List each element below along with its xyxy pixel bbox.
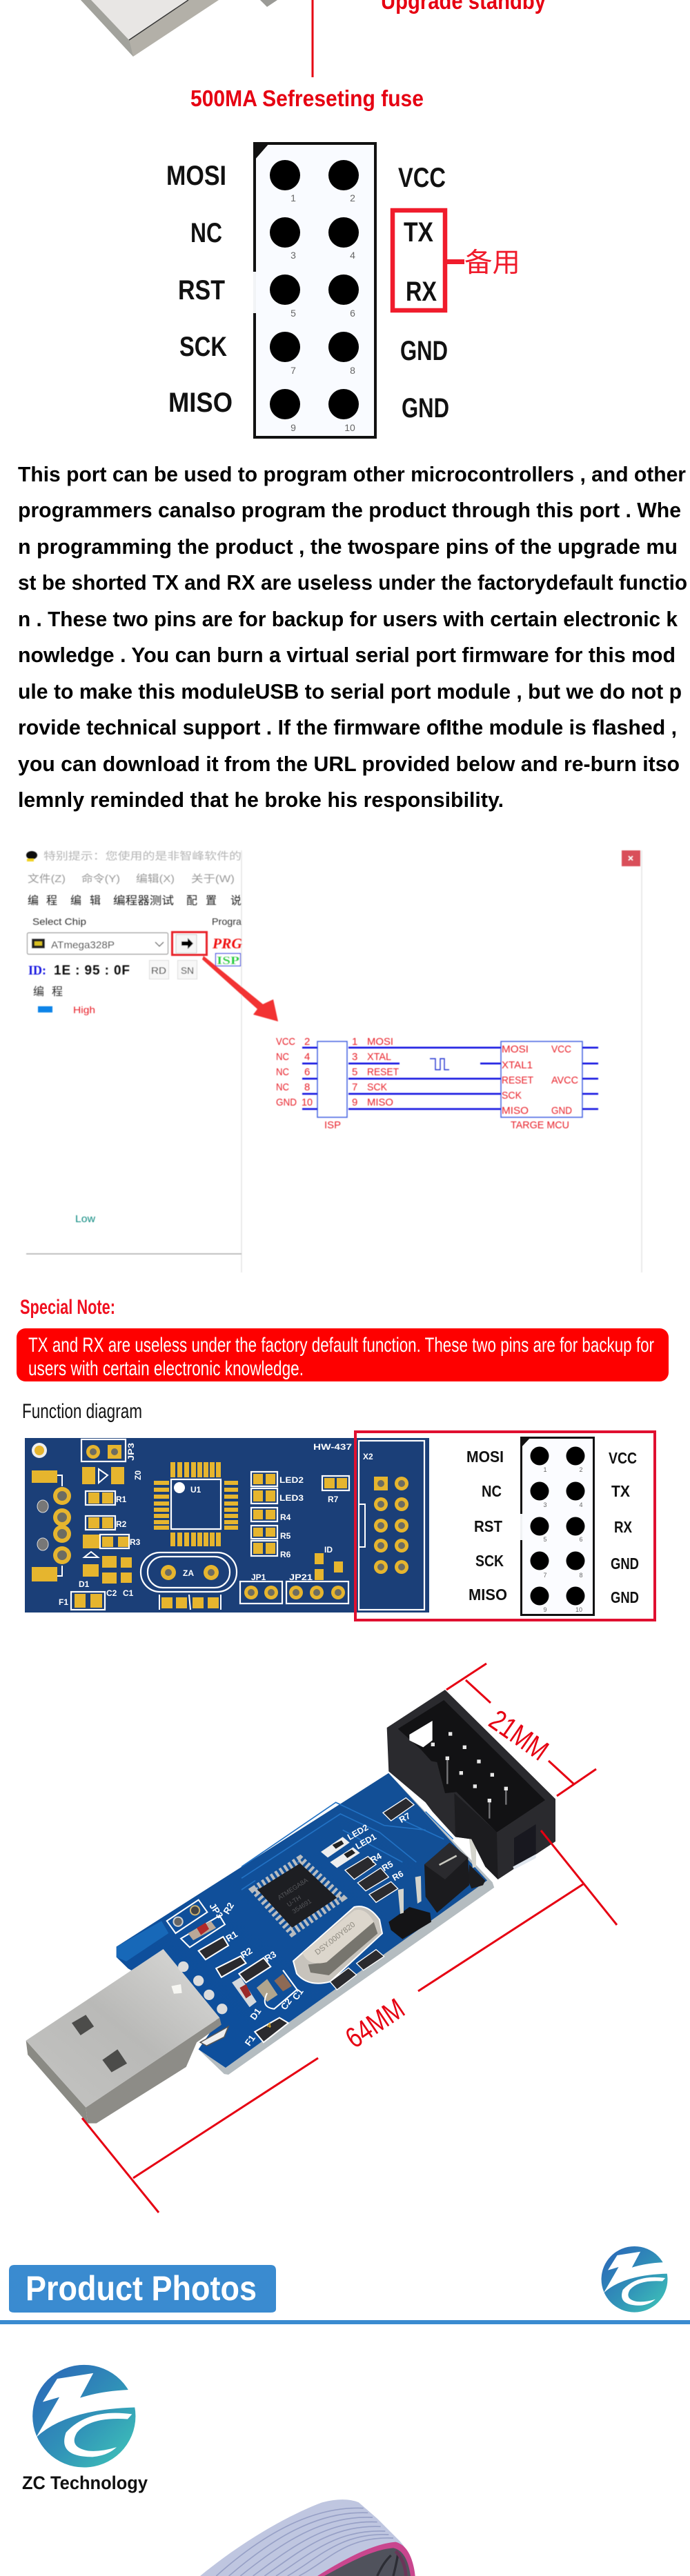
dimension lines xyxy=(82,1664,617,2213)
right pin labels: GND xyxy=(402,393,449,423)
microcontroller chip: U-TH xyxy=(286,1894,302,1908)
diode D1 capacitors C1 C2 fuse F1: C2 xyxy=(106,1588,117,1598)
menu bar: 关于(W) xyxy=(191,873,235,885)
title text: 特别提示：您使用的是非智峰软件的 xyxy=(43,850,241,862)
schematic labels: RESET xyxy=(502,1075,533,1086)
photo fragment: USB plug cropped at top xyxy=(81,0,277,57)
text block: port description: you can download it from the URL provided below and re-burn itso xyxy=(18,752,680,776)
MCU U1: U1 xyxy=(190,1485,201,1495)
schematic labels: 5 xyxy=(352,1066,357,1078)
chip id: 1E : 95 : 0F xyxy=(54,963,130,978)
pin holes xyxy=(270,160,359,419)
board silkscreen left: C2 xyxy=(279,1997,294,2012)
waveform xyxy=(430,1059,449,1070)
board silkscreen right: LED1 xyxy=(354,1832,378,1851)
text block: port description: n programming the product , the twospare pins of the upgrade mu xyxy=(18,535,678,559)
small header holes xyxy=(530,1447,585,1606)
board silkscreen right: R5 xyxy=(380,1859,395,1873)
arrow button xyxy=(172,932,207,955)
icon: large ZC logo xyxy=(32,2365,137,2468)
brand name: ZC Technology xyxy=(22,2473,148,2493)
menu bar xyxy=(28,872,235,885)
wires xyxy=(302,1048,598,1109)
resistors R1 R2 R3: R3 xyxy=(130,1537,141,1547)
LEDs and resistors R4 to R7: LED3 xyxy=(279,1493,304,1503)
program label: Progra xyxy=(212,916,241,927)
jumpers JP1 JP2 xyxy=(240,1572,348,1604)
schematic labels: MOSI xyxy=(502,1044,529,1055)
left labels: MISO xyxy=(469,1586,507,1604)
LEDs and resistors R4 to R7: R7 xyxy=(328,1495,339,1504)
pin numbers xyxy=(290,192,355,433)
pin numbers: 3 xyxy=(290,250,296,261)
small header numbers xyxy=(543,1466,583,1613)
text block: port description: lemnly reminded that he broke his responsibility. xyxy=(18,788,504,812)
board silkscreen left xyxy=(207,1901,306,2048)
schematic labels: XTAL1 xyxy=(502,1059,533,1071)
schematic labels: 6 xyxy=(304,1066,310,1078)
text block: port description: This port can be used to program other microcontrollers , and other xyxy=(18,462,686,486)
schematic labels: MOSI xyxy=(367,1036,393,1048)
arrow: red pointer to schematic xyxy=(202,956,278,1021)
ID pads: ID xyxy=(324,1545,333,1555)
tabs: 说 xyxy=(230,895,241,907)
board silkscreen left: R3 xyxy=(263,1949,278,1964)
board label: HW-437 xyxy=(313,1442,352,1452)
microcontroller chip: 354691 xyxy=(291,1897,313,1915)
tabs: 编程器测试 xyxy=(113,895,174,907)
left pin labels: RST xyxy=(178,275,225,306)
crystal oscillator: DSY.000Y820 xyxy=(313,1921,357,1957)
SMD parts left xyxy=(32,1470,62,1581)
schematic labels: GND xyxy=(276,1097,297,1108)
menu bar: 命令(Y) xyxy=(81,872,120,885)
chip id: SN xyxy=(181,965,194,976)
heading: special note: Special Note: xyxy=(20,1296,115,1319)
pin numbers: 2 xyxy=(350,192,355,203)
LEDs and resistors R4 to R7: R4 xyxy=(280,1512,291,1522)
callout: red warning banner xyxy=(17,1328,669,1381)
pin numbers: 7 xyxy=(290,365,296,376)
schematic labels: SCK xyxy=(367,1081,387,1093)
USB pads xyxy=(37,1487,71,1564)
heading: function diagram: Function diagram xyxy=(22,1400,142,1423)
close button: × xyxy=(628,852,633,863)
traces xyxy=(241,1802,453,1890)
crystal: ZA xyxy=(183,1568,194,1578)
spare pins highlight xyxy=(393,210,520,310)
callout: 500MA fuse label: 500MA Sefreseting fuse xyxy=(190,86,424,111)
pin numbers: 6 xyxy=(350,308,355,319)
chip selector xyxy=(28,916,168,955)
resistors R1 R2 R3 xyxy=(83,1491,141,1548)
text block: port description: n . These two pins are for backup for users with certain electronic k xyxy=(18,607,678,631)
schematic labels: TARGE MCU xyxy=(511,1119,569,1131)
small header numbers: 6 xyxy=(579,1536,583,1543)
board silkscreen left: R2 xyxy=(221,1901,236,1916)
right pin labels: GND xyxy=(400,336,448,366)
header notch xyxy=(255,143,269,160)
JP3: JP3 xyxy=(126,1443,136,1461)
schematic labels: RESET xyxy=(367,1066,399,1078)
panel: programmer software screenshot xyxy=(26,850,642,1272)
schematic labels: NC xyxy=(276,1066,289,1078)
program label: PRG xyxy=(212,935,242,952)
tabs: 配 置 xyxy=(186,895,217,907)
chip selector: Select Chip xyxy=(32,916,86,927)
circuit board xyxy=(117,1773,494,2075)
dimension label: length: 64MM xyxy=(339,1992,411,2055)
JP3 xyxy=(81,1439,136,1461)
jumpers JP1 JP2: JP21 xyxy=(289,1572,313,1582)
pin numbers: 9 xyxy=(290,422,296,433)
pin headers and jumper xyxy=(388,1839,485,1939)
small header numbers: 2 xyxy=(579,1466,583,1473)
panel: pinout highlight box xyxy=(355,1432,655,1620)
menu bar: 编辑(X) xyxy=(136,873,175,885)
LEDs and resistors R4 to R7: R5 xyxy=(280,1531,291,1541)
pin numbers: 8 xyxy=(350,365,355,376)
board silkscreen left: JP3 xyxy=(207,1901,225,1920)
tabs xyxy=(28,895,241,907)
bottom pads xyxy=(159,1595,221,1610)
X2 connector footprint: X2 xyxy=(363,1452,373,1461)
spare pins highlight: 备用 xyxy=(464,248,520,278)
LEDs and resistors R4 to R7 xyxy=(251,1472,349,1559)
schematic labels: MISO xyxy=(367,1097,393,1108)
callout: red warning banner: users with certain electronic knowledge. xyxy=(28,1357,304,1380)
schematic labels: 10 xyxy=(302,1097,313,1108)
app icon xyxy=(26,851,37,861)
ID pads xyxy=(315,1545,343,1580)
header outline xyxy=(255,143,375,437)
chip id: ID: xyxy=(28,963,46,978)
crystal side pads xyxy=(330,1950,384,1990)
board silkscreen left: F1 xyxy=(243,2033,257,2048)
jumpers JP1 JP2: JP1 xyxy=(251,1572,266,1582)
small header numbers: 7 xyxy=(543,1572,547,1579)
board silkscreen right xyxy=(346,1811,412,1883)
right pin labels: TX xyxy=(404,217,433,248)
window edges xyxy=(26,850,642,1272)
section divider xyxy=(0,2320,690,2324)
small header numbers: 3 xyxy=(543,1501,547,1508)
black IDC connector xyxy=(387,1690,555,1879)
left pin labels: MISO xyxy=(168,388,233,418)
ISP box xyxy=(317,1041,347,1117)
level indicator: Low xyxy=(75,1213,95,1225)
red frame xyxy=(355,1432,655,1620)
pin numbers: 1 xyxy=(290,192,296,203)
pin numbers: 5 xyxy=(290,308,296,319)
chip id: RD xyxy=(151,965,166,976)
USB plug xyxy=(26,1949,228,2124)
program label xyxy=(212,916,242,967)
right labels xyxy=(609,1449,639,1606)
schematic labels: 7 xyxy=(352,1081,357,1093)
diode D1 capacitors C1 C2 fuse F1: D1 xyxy=(79,1579,90,1589)
MCU U1 xyxy=(154,1462,238,1546)
schematic labels: AVCC xyxy=(551,1075,578,1086)
product photo: USBASP module xyxy=(26,1664,617,2213)
crystal xyxy=(141,1552,237,1592)
resistors R1 R2 R3: R2 xyxy=(116,1519,127,1529)
right labels: GND xyxy=(611,1588,639,1606)
small header numbers: 4 xyxy=(579,1501,583,1508)
close button xyxy=(622,850,640,866)
text block: port description: programmers canalso program the product through this port . Whe xyxy=(18,498,681,522)
schematic labels: ISP xyxy=(324,1119,341,1131)
crystal oscillator xyxy=(293,1906,382,1984)
diode D1 capacitors C1 C2 fuse F1: F1 xyxy=(59,1597,68,1607)
dimension label: width: 21MM xyxy=(484,1704,555,1767)
schematic labels: MISO xyxy=(502,1105,529,1117)
left labels xyxy=(466,1448,507,1604)
right labels: RX xyxy=(614,1518,633,1536)
left pin labels xyxy=(166,161,233,418)
left labels: SCK xyxy=(475,1552,504,1570)
schematic labels: 2 xyxy=(304,1036,310,1048)
schematic labels: SCK xyxy=(502,1090,522,1101)
right pin labels: VCC xyxy=(398,163,446,193)
diode D1 capacitors C1 C2 fuse F1: C1 xyxy=(123,1588,134,1598)
board xyxy=(25,1438,429,1613)
level indicator: High xyxy=(73,1004,95,1015)
menu bar: 文件(Z) xyxy=(28,873,66,885)
small header outline xyxy=(522,1437,593,1615)
microcontroller chip: ATMEGA8A xyxy=(277,1877,310,1901)
schematic labels: 1 xyxy=(352,1036,357,1048)
LEDs and resistors R4 to R7: R6 xyxy=(280,1550,291,1559)
text block: port description: nowledge . You can burn a virtual serial port firmware for this mod xyxy=(18,643,676,667)
schematic labels: 8 xyxy=(304,1081,310,1093)
board silkscreen right: R6 xyxy=(391,1869,405,1883)
left board parts xyxy=(167,1900,297,2042)
left pin labels: NC xyxy=(190,218,222,248)
schematic labels: NC xyxy=(276,1081,289,1093)
board silkscreen left: R2 xyxy=(239,1946,254,1960)
board silkscreen left: C1 xyxy=(290,1986,306,2002)
small header numbers: 1 xyxy=(543,1466,547,1473)
level indicator xyxy=(38,1004,95,1225)
tabs: 编 程 xyxy=(28,895,57,907)
pin numbers: 4 xyxy=(350,250,355,261)
right pin labels: RX xyxy=(406,277,437,307)
schematic labels: XTAL xyxy=(367,1051,391,1063)
schematic labels xyxy=(276,1036,578,1131)
right pin labels xyxy=(398,163,449,423)
right labels: GND xyxy=(611,1555,639,1572)
chip id xyxy=(28,960,197,979)
product photo: ribbon cable xyxy=(200,2499,415,2576)
small header numbers: 8 xyxy=(579,1572,583,1579)
target box xyxy=(501,1041,582,1117)
icon: small ZC logo xyxy=(602,2246,668,2313)
schematic labels: 9 xyxy=(352,1097,357,1108)
schematic labels: GND xyxy=(551,1105,572,1117)
left pin labels: MOSI xyxy=(166,161,226,191)
diode Z0 xyxy=(82,1467,143,1484)
board silkscreen right: R4 xyxy=(368,1851,384,1865)
left labels: MOSI xyxy=(466,1448,504,1466)
board silkscreen right: R7 xyxy=(397,1811,412,1825)
LEDs and resistors R4 to R7: LED2 xyxy=(279,1475,304,1485)
small header numbers: 9 xyxy=(543,1606,547,1613)
small header notch xyxy=(521,1437,531,1448)
right labels: TX xyxy=(611,1482,631,1500)
schematic labels: VCC xyxy=(551,1044,571,1055)
small header numbers: 5 xyxy=(543,1536,547,1543)
text block: port description: ule to make this moduleUSB to serial port module , but we do not p xyxy=(18,679,682,703)
board silkscreen right: LED2 xyxy=(346,1823,370,1842)
resistors R1 R2 R3: R1 xyxy=(116,1495,127,1504)
section heading: product photos: Product Photos xyxy=(26,2269,257,2308)
left pin labels: SCK xyxy=(179,332,227,362)
diode Z0: Z0 xyxy=(133,1470,143,1480)
LEDs and resistors xyxy=(321,1798,414,1902)
small header numbers: 10 xyxy=(575,1606,582,1613)
left board parts: 4 xyxy=(267,2022,271,2030)
right labels: VCC xyxy=(609,1449,637,1467)
schematic labels: 3 xyxy=(352,1051,357,1063)
board silkscreen left: D1 xyxy=(248,2006,263,2021)
diode D1 capacitors C1 C2 fuse F1 xyxy=(59,1552,134,1610)
left labels: NC xyxy=(482,1482,502,1500)
microcontroller chip xyxy=(254,1859,342,1933)
schematic labels: 4 xyxy=(304,1051,310,1063)
pinout diagram: ISP header xyxy=(166,143,520,437)
text block: port description xyxy=(18,462,687,812)
chip selector: ATmega328P xyxy=(51,939,115,951)
pin numbers: 10 xyxy=(344,422,355,433)
left labels: RST xyxy=(474,1517,502,1535)
program group label: 编 程 xyxy=(33,986,63,998)
board silkscreen left: R1 xyxy=(224,1929,239,1944)
diagram: PCB layout xyxy=(25,1438,429,1613)
X2 connector footprint xyxy=(359,1441,424,1610)
mounting pad xyxy=(32,1443,47,1458)
tabs: 编 辑 xyxy=(70,895,101,907)
schematic labels: NC xyxy=(276,1051,289,1063)
schematic: ISP wiring xyxy=(276,1036,598,1131)
schematic labels: VCC xyxy=(276,1036,295,1048)
program label: ISP xyxy=(217,954,239,967)
text block: port description: rovide technical support . If the firmware ofIthe module is flashed , xyxy=(18,715,677,739)
